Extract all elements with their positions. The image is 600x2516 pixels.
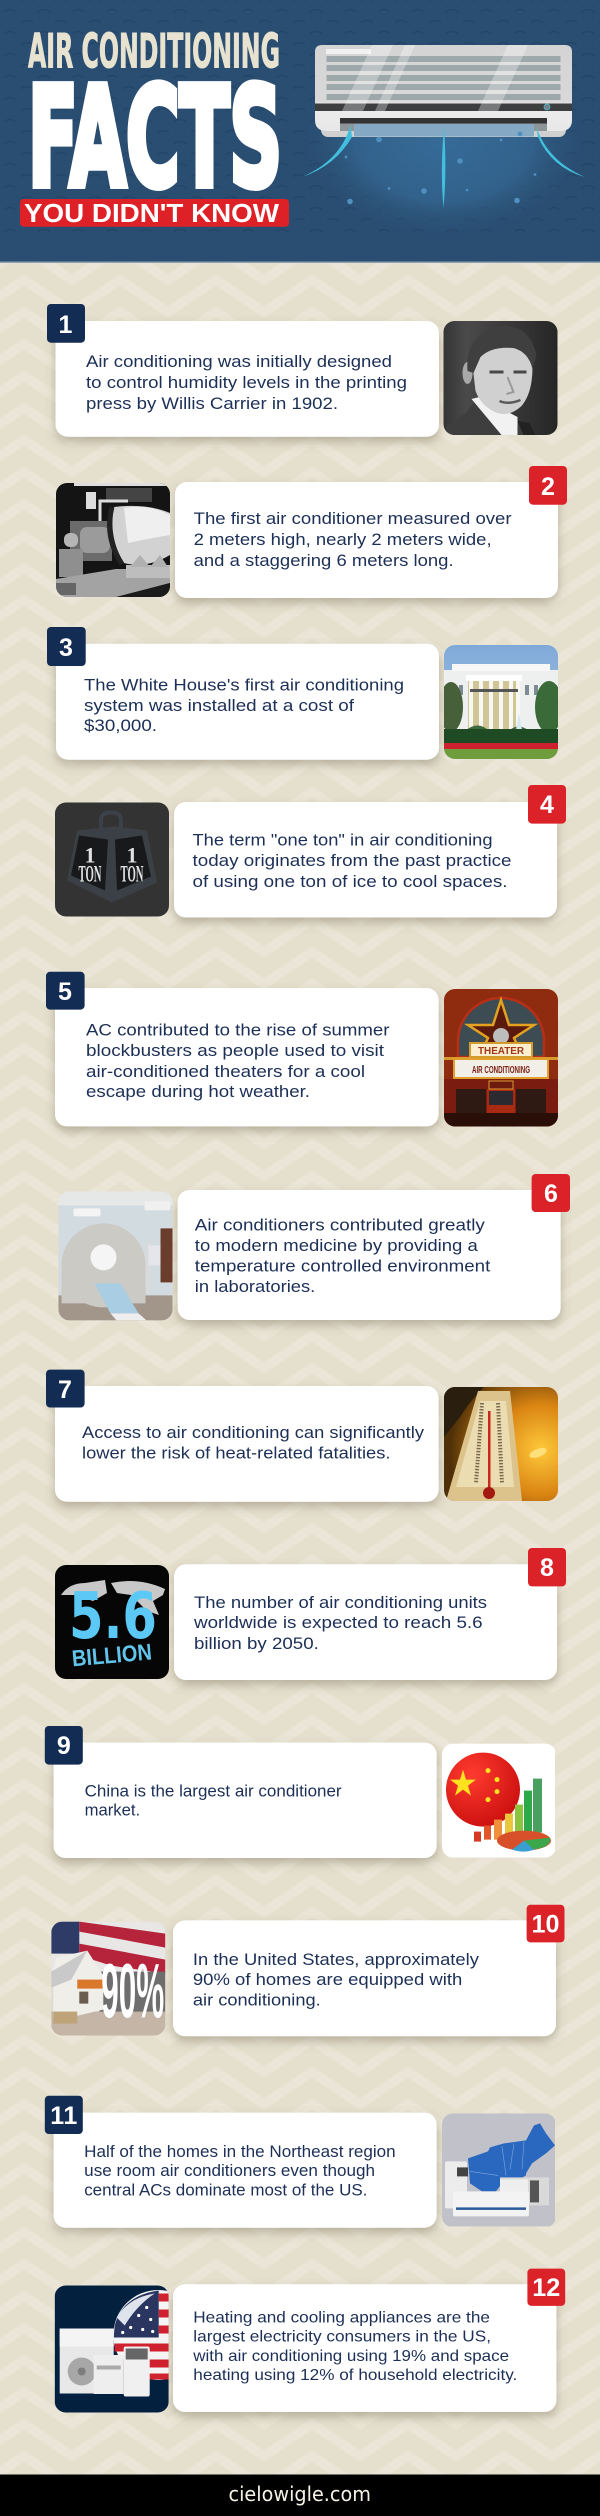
text 6: temperature controlled environment bbox=[195, 1256, 491, 1275]
badge 4: 4 bbox=[540, 791, 554, 819]
subtitle ribbon: YOU DIDN'T KNOW bbox=[24, 198, 279, 228]
photo: first air conditioner machine bbox=[56, 483, 170, 597]
card 6 bbox=[178, 1190, 561, 1320]
badge 12: 12 bbox=[532, 2274, 560, 2302]
photo: northeast map and air conditioners bbox=[442, 2113, 555, 2226]
text 5: AC contributed to the rise of summer bbox=[86, 1021, 390, 1040]
badge 5: 5 bbox=[58, 978, 72, 1006]
text 10: 90% of homes are equipped with bbox=[193, 1970, 462, 1989]
photo: US flag sphere and appliances bbox=[54, 2286, 169, 2412]
photo: 5.6 billion graphic: BILLION bbox=[71, 1638, 153, 1671]
text 2: The first air conditioner measured over bbox=[194, 509, 512, 528]
fact 6 bbox=[58, 1174, 570, 1320]
text 12: with air conditioning using 19% and space bbox=[192, 2348, 509, 2365]
text 5: escape during hot weather. bbox=[86, 1082, 310, 1101]
photo: 5.6 billion graphic bbox=[55, 1565, 169, 1679]
badge 7 bbox=[46, 1370, 85, 1408]
text 12: heating using 12% of household electricity. bbox=[193, 2367, 517, 2384]
text 6: in laboratories. bbox=[195, 1277, 315, 1296]
fact 8 bbox=[55, 1548, 566, 1680]
text 8 bbox=[193, 1593, 487, 1653]
photo: 5.6 billion graphic: 5.6 bbox=[69, 1580, 157, 1654]
text 10: air conditioning. bbox=[193, 1990, 321, 2009]
text 8: worldwide is expected to reach 5.6 bbox=[193, 1613, 483, 1632]
text 6 bbox=[195, 1216, 491, 1296]
badge 3 bbox=[47, 627, 86, 666]
fact 10 bbox=[51, 1905, 565, 2036]
badge 2 bbox=[529, 466, 567, 505]
text 11: central ACs dominate most of the US. bbox=[84, 2180, 367, 2200]
fact 10: 90% bbox=[101, 1949, 164, 2035]
text 1: to control humidity levels in the printing bbox=[86, 373, 407, 392]
card 9 bbox=[54, 1742, 437, 1858]
header banner bbox=[0, 0, 600, 263]
text 1 bbox=[86, 352, 407, 413]
badge 1: 1 bbox=[59, 311, 73, 339]
text 2 bbox=[194, 509, 512, 570]
text 1: press by Willis Carrier in 1902. bbox=[86, 394, 338, 413]
card 3 bbox=[56, 644, 439, 760]
text 9: China is the largest air conditioner bbox=[85, 1781, 342, 1800]
air conditioner illustration bbox=[299, 40, 589, 240]
photo: theater marquee: THEATER bbox=[478, 1046, 525, 1057]
badge 9 bbox=[45, 1726, 83, 1765]
badge 11 bbox=[45, 2096, 83, 2134]
text 10 bbox=[193, 1950, 479, 2009]
text 6: Air conditioners contributed greatly bbox=[195, 1216, 485, 1235]
badge 8: 8 bbox=[540, 1554, 554, 1582]
card 11 bbox=[54, 2113, 437, 2228]
footer bar bbox=[0, 2474, 600, 2516]
text 2: 2 meters high, nearly 2 meters wide, bbox=[194, 530, 492, 549]
text 7: lower the risk of heat-related fatalities. bbox=[82, 1444, 390, 1463]
badge 4 bbox=[528, 785, 566, 824]
text 11: use room air conditioners even though bbox=[84, 2161, 375, 2180]
card 2 bbox=[175, 482, 558, 598]
text 12: largest electricity consumers in the US, bbox=[193, 2329, 491, 2346]
badge 2: 2 bbox=[541, 473, 555, 501]
fact 4 bbox=[55, 785, 566, 918]
photo: China flag sphere with charts bbox=[442, 1744, 555, 1858]
card 1 bbox=[56, 321, 439, 437]
fact 3 bbox=[47, 627, 563, 760]
badge 1 bbox=[47, 304, 85, 343]
text 11: Half of the homes in the Northeast region bbox=[84, 2142, 396, 2161]
card 10 bbox=[173, 1920, 556, 2036]
text 9 bbox=[85, 1781, 342, 1820]
photo: theater marquee: AIR CONDITIONING bbox=[472, 1065, 530, 1076]
card 12 bbox=[173, 2284, 556, 2412]
text 1: Air conditioning was initially designed bbox=[86, 352, 392, 371]
text 5: blockbusters as people used to visit bbox=[86, 1041, 384, 1060]
text 6: to modern medicine by providing a bbox=[195, 1236, 478, 1255]
text 2: and a staggering 6 meters long. bbox=[194, 551, 454, 570]
text 8: billion by 2050. bbox=[194, 1634, 319, 1653]
text 8: The number of air conditioning units bbox=[194, 1593, 487, 1612]
text 10: In the United States, approximately bbox=[193, 1950, 479, 1969]
badge 10: 10 bbox=[532, 1910, 560, 1938]
title line: air conditioning: AIR CONDITIONING bbox=[28, 24, 280, 80]
text 3: system was installed at a cost of bbox=[84, 696, 354, 715]
text 7: Access to air conditioning can significantly bbox=[82, 1423, 425, 1442]
text 12: Heating and cooling appliances are the bbox=[193, 2309, 490, 2326]
photo: CT scanner room bbox=[58, 1191, 172, 1320]
photo: house, flag and 90 percent bbox=[51, 1922, 165, 2036]
photo: Willis Carrier portrait bbox=[444, 321, 558, 435]
text 5 bbox=[86, 1021, 390, 1101]
card 7 bbox=[55, 1386, 439, 1502]
fact 7 bbox=[46, 1370, 558, 1502]
badge 9: 9 bbox=[57, 1732, 71, 1760]
text 4 bbox=[192, 831, 512, 891]
photo: one ton weight: TON bbox=[78, 862, 102, 886]
badge 6: 6 bbox=[544, 1180, 558, 1208]
badge 6 bbox=[532, 1174, 570, 1212]
photo: one ton weight bbox=[55, 802, 169, 916]
title line: facts: FACTS bbox=[28, 59, 282, 218]
fact 2 bbox=[56, 466, 567, 598]
badge 10 bbox=[527, 1905, 564, 1942]
fact 1 bbox=[47, 304, 558, 437]
badge 5 bbox=[46, 972, 85, 1010]
badge 3: 3 bbox=[59, 634, 73, 662]
text 3: The White House's first air conditioning bbox=[84, 676, 404, 695]
card 8 bbox=[174, 1564, 557, 1680]
text 7 bbox=[82, 1423, 425, 1463]
fact 9 bbox=[45, 1726, 555, 1858]
card 5 bbox=[55, 988, 439, 1126]
fact 5 bbox=[46, 972, 558, 1127]
photo: White House bbox=[439, 645, 563, 759]
text 4: The term "one ton" in air conditioning bbox=[192, 831, 492, 850]
text 4: of using one ton of ice to cool spaces. bbox=[192, 872, 508, 891]
badge 8 bbox=[528, 1548, 566, 1586]
text 3 bbox=[84, 676, 404, 735]
fact 12 bbox=[55, 2269, 565, 2412]
photo: thermometer in heat bbox=[444, 1387, 558, 1501]
footer website text: cielowigle.com bbox=[228, 2482, 371, 2506]
text 5: air-conditioned theaters for a cool bbox=[86, 1062, 365, 1081]
text 11 bbox=[84, 2142, 396, 2200]
text 12 bbox=[192, 2309, 517, 2384]
fact 11 bbox=[45, 2096, 555, 2228]
card 4 bbox=[174, 802, 557, 918]
photo: one ton weight: 1 bbox=[126, 842, 138, 868]
text 9: market. bbox=[85, 1801, 140, 1820]
badge 11: 11 bbox=[50, 2102, 77, 2130]
photo: theater marquee bbox=[444, 989, 558, 1127]
badge 12 bbox=[527, 2269, 565, 2306]
badge 7: 7 bbox=[58, 1376, 72, 1404]
text 3: $30,000. bbox=[84, 716, 157, 735]
text 4: today originates from the past practice bbox=[192, 851, 512, 870]
photo: one ton weight: TON bbox=[120, 862, 144, 886]
photo: one ton weight: 1 bbox=[84, 842, 96, 868]
